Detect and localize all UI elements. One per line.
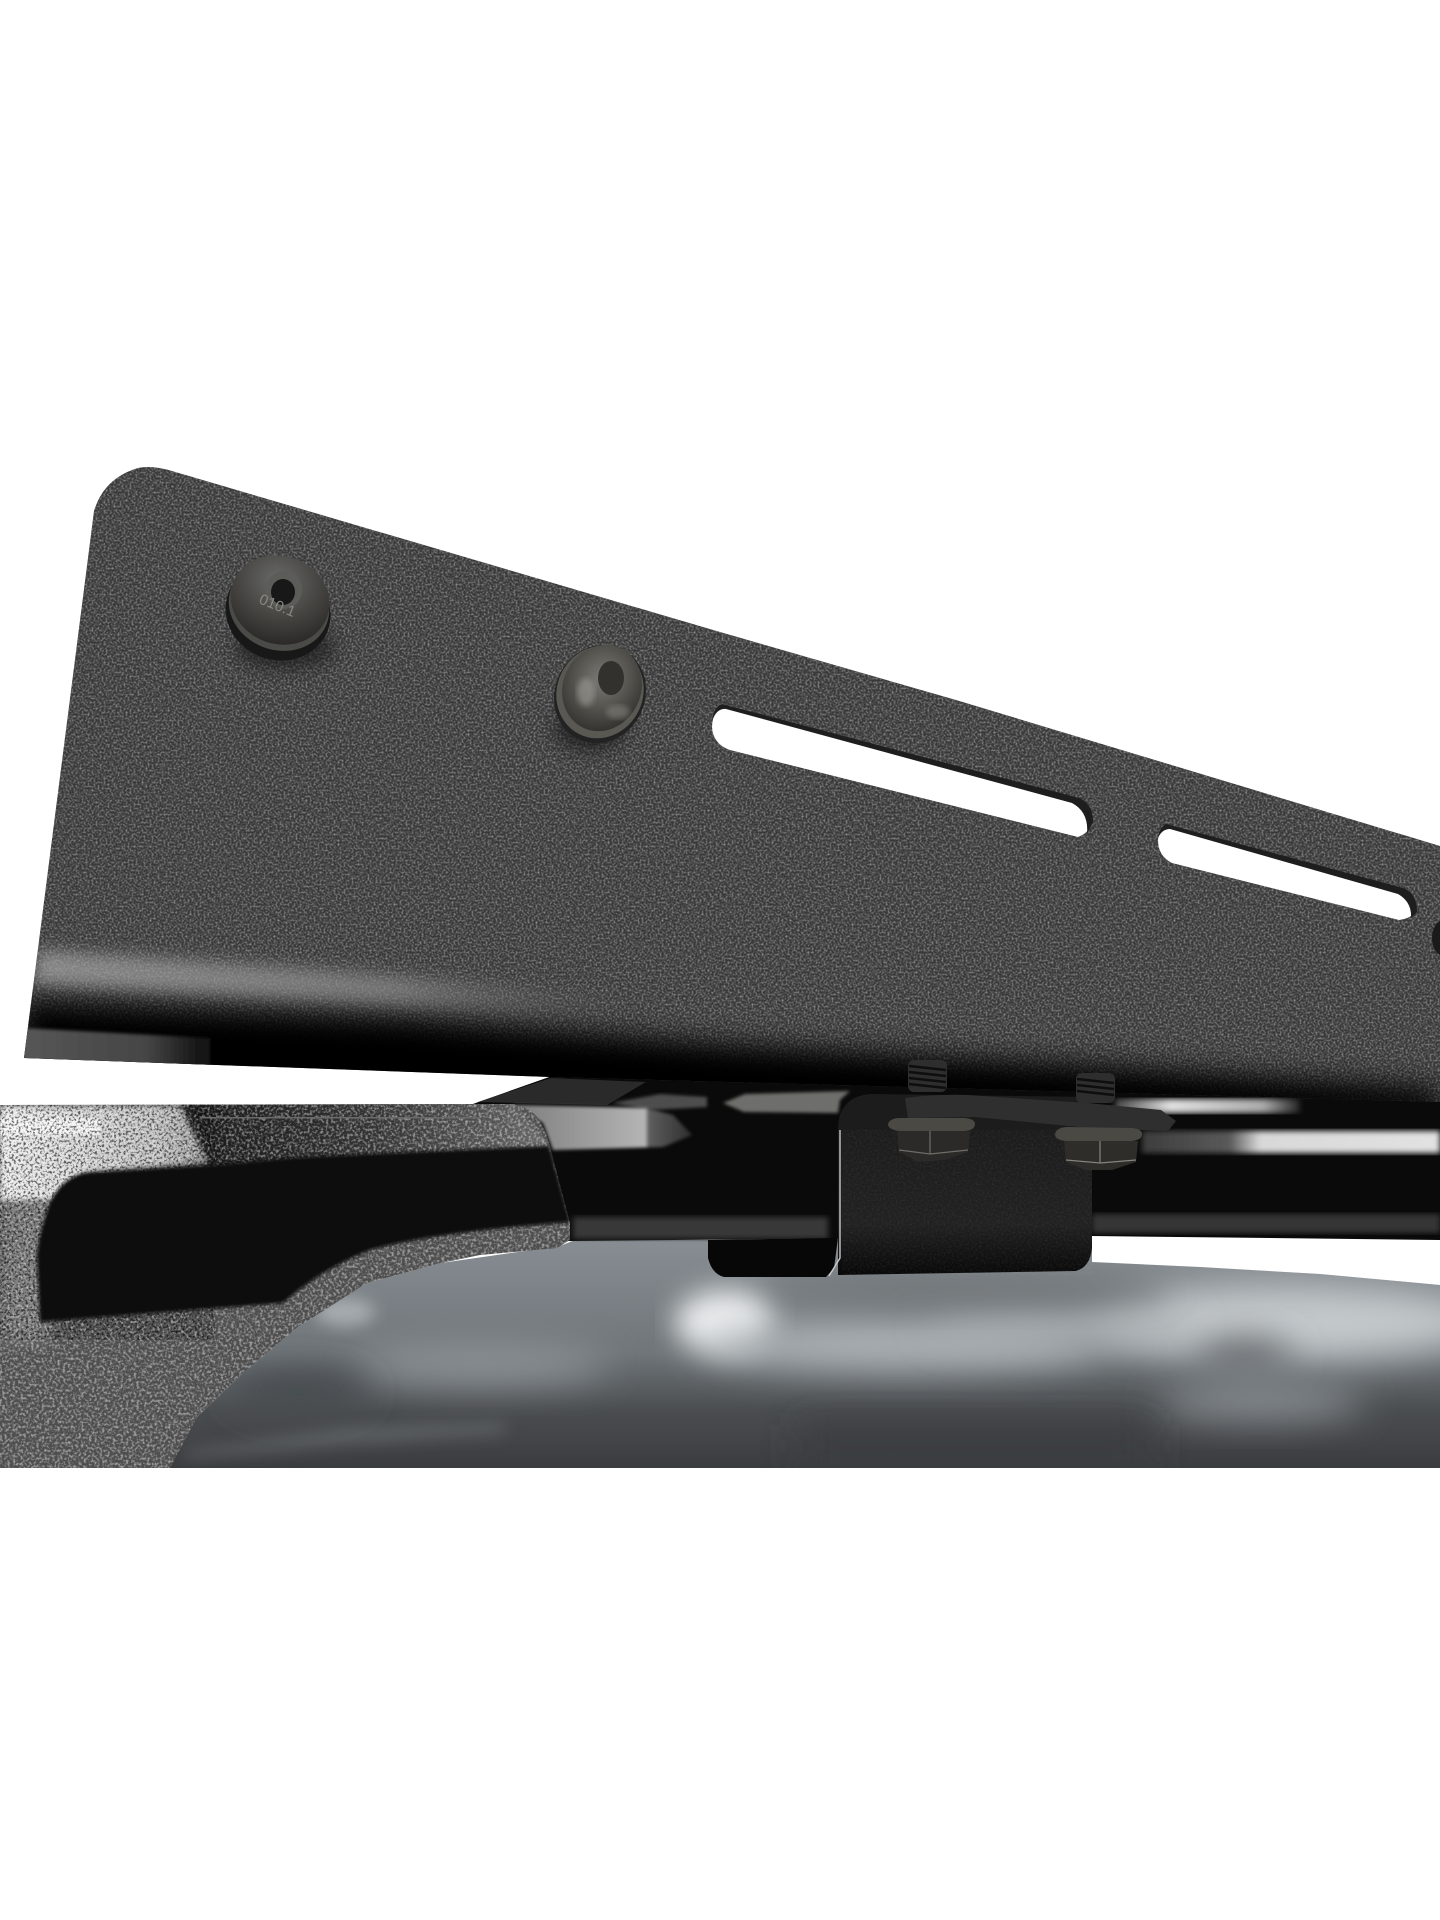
head highlights xyxy=(577,678,595,706)
slot: second mounting slot xyxy=(1158,824,1417,920)
middle highlight right xyxy=(1142,1131,1440,1153)
washer and nut one xyxy=(888,1118,975,1162)
thin line on foot xyxy=(200,1117,480,1118)
panel: rail clamp assembly xyxy=(708,1060,1176,1277)
panel: textured rail foot xyxy=(0,1100,575,1470)
black recess on foot xyxy=(37,1146,570,1322)
slot: first mounting slot xyxy=(712,704,1093,837)
bolt: partial screw at right edge xyxy=(1432,920,1440,956)
tube highlight left xyxy=(513,1105,692,1150)
bend highlight xyxy=(33,942,569,1015)
bolt: large button head screw xyxy=(212,542,344,675)
upper highlight right xyxy=(1115,1099,1300,1113)
bolt: small button head screw xyxy=(538,630,662,758)
clamp band xyxy=(838,1094,1092,1275)
clamp seam xyxy=(829,1130,840,1276)
threaded stud one xyxy=(908,1060,947,1092)
socket xyxy=(266,571,302,609)
washer and nut two xyxy=(1055,1127,1142,1170)
left clamp underside xyxy=(708,1238,838,1277)
threaded stud two xyxy=(1076,1073,1115,1103)
bright band on foot top xyxy=(0,1118,100,1135)
lower tube strip left xyxy=(573,1217,828,1239)
dim bar highlight xyxy=(612,1094,707,1110)
photo: roof rack bracket mounted on vehicle rail xyxy=(0,467,1440,1468)
bright highlight on foot xyxy=(0,1106,208,1200)
panel: vehicle roof surface xyxy=(150,1235,1440,1468)
lower lip xyxy=(23,1028,210,1070)
panel: dark roof rail tube xyxy=(470,1076,1440,1241)
shadow beneath bend xyxy=(20,1000,1440,1120)
panel: textured steel bracket xyxy=(0,440,1440,1120)
mounting tab xyxy=(905,1095,1176,1131)
stamped marking: 010.1 xyxy=(257,591,298,621)
cross bar behind bracket xyxy=(478,1078,646,1105)
lower tube strip right xyxy=(1092,1214,1440,1233)
metallic spike xyxy=(723,1091,850,1113)
socket xyxy=(598,661,624,695)
